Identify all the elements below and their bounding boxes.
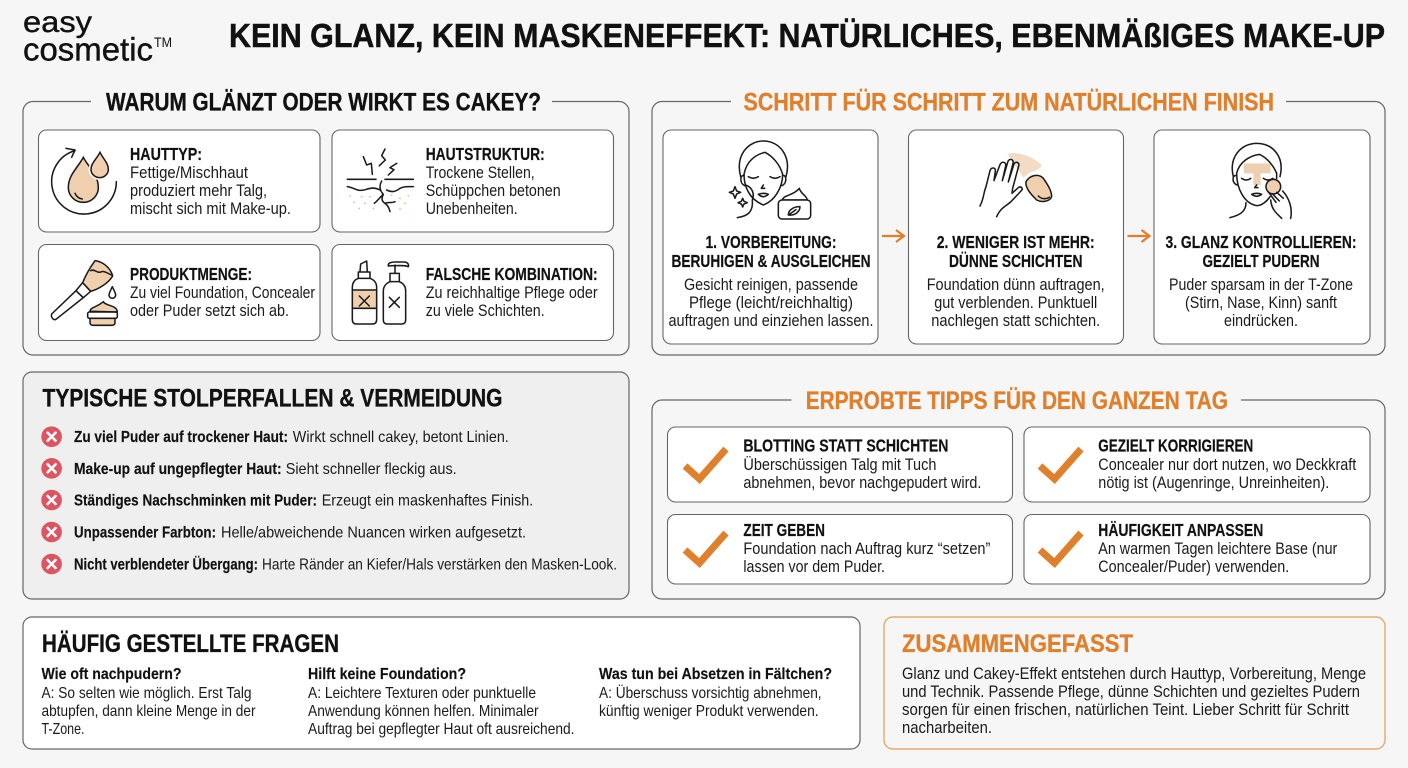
logo: easy <box>23 6 92 39</box>
tip: blotting: abnehmen, bevor nachgepudert wird. <box>743 474 981 492</box>
tip: zeit geben: Foundation nach Auftrag kurz “setzen” <box>743 540 990 558</box>
pitfall 1 <box>41 426 509 447</box>
text: Falsche Kombination: FALSCHE KOMBINATION: <box>426 264 598 284</box>
arrow: step 2 to 3 <box>1128 230 1150 242</box>
pitfall 4: Helle/abweichende Nuancen wirken aufgesetzt. <box>221 524 526 542</box>
pitfall 3: Erzeugt ein maskenhaftes Finish. <box>322 492 533 510</box>
pitfall 1: Zu viel Puder auf trockener Haut: <box>74 429 288 446</box>
text: step 2: 2. WENIGER IST MEHR: <box>937 232 1095 252</box>
text: step 2: gut verblenden. Punktuell <box>934 294 1097 312</box>
icon: cracked skin <box>347 149 413 212</box>
heading: pitfalls: TYPISCHE STOLPERFALLEN & VERMEIDUNG <box>42 385 502 413</box>
text: step 2: nachlegen statt schichten. <box>931 312 1100 330</box>
text: Produktmenge: Zu viel Foundation, Concealer <box>130 284 315 302</box>
text: step 1: 1. VORBEREITUNG: <box>706 232 836 252</box>
text: Falsche Kombination <box>426 264 598 320</box>
text: summary: und Technik. Passende Pflege, dünne Schichten und gezieltes Pudern <box>902 683 1360 701</box>
icon: face with T-zone <box>1230 143 1291 218</box>
text: step 3: (Stirn, Nase, Kinn) sanft <box>1185 294 1337 312</box>
text: step 1: Pflege (leicht/reichhaltig) <box>689 294 853 312</box>
text: Hautstruktur <box>426 144 561 218</box>
FAQ column 1: Wie oft nachpudern? <box>42 666 182 683</box>
card: Produktmenge <box>38 244 320 340</box>
text: step 2 <box>927 232 1105 330</box>
text: summary <box>902 665 1366 737</box>
FAQ column 3: A: Überschuss vorsichtig abnehmen, <box>599 684 822 702</box>
card: Falsche Kombination <box>332 244 614 340</box>
FAQ column 1 <box>42 666 256 738</box>
heading: causes: WARUM GLÄNZT ODER WIRKT ES CAKEY? <box>106 89 541 117</box>
FAQ column 2: Hilft keine Foundation? <box>308 666 466 683</box>
text: step 2: Foundation dünn auftragen, <box>927 276 1105 294</box>
text: Produktmenge: oder Puder setzt sich ab. <box>130 302 289 320</box>
logo: TM <box>154 35 172 50</box>
card: step 3 <box>1154 130 1370 344</box>
card: step 2 <box>908 130 1124 344</box>
pitfall 4: Unpassender Farbton: <box>74 524 216 542</box>
icon: oil drops <box>52 148 116 214</box>
pitfall 2: Make-up auf ungepflegter Haut: <box>74 461 282 478</box>
FAQ column 3: künftig weniger Produkt verwenden. <box>599 703 819 720</box>
logo <box>23 6 172 68</box>
panel: tips <box>652 386 1385 599</box>
text: Hauttyp: HAUTTYP: <box>130 144 202 164</box>
text: step 3 <box>1166 232 1356 330</box>
panel: pitfalls <box>23 372 629 599</box>
pitfall 2 <box>41 458 457 479</box>
FAQ column 1: T-Zone. <box>42 721 84 738</box>
text: Falsche Kombination: Zu reichhaltige Pflege oder <box>426 284 598 302</box>
text: step 3: Puder sparsam in der T-Zone <box>1169 276 1353 294</box>
text: summary: nacharbeiten. <box>902 719 992 737</box>
icon: face and cream <box>729 141 811 219</box>
icon: bottles <box>352 261 409 324</box>
text: step 3: eindrücken. <box>1224 312 1298 330</box>
pitfall 5: Nicht verblendeter Übergang: <box>74 554 258 574</box>
heading: tips: ERPROBTE TIPPS FÜR DEN GANZEN TAG <box>806 386 1228 415</box>
card: Hautstruktur <box>332 130 614 232</box>
text: summary: Glanz und Cakey-Effekt entstehen durch Hauttyp, Vorbereitung, Menge <box>902 665 1366 683</box>
text: step 3: 3. GLANZ KONTROLLIEREN: <box>1166 232 1356 252</box>
FAQ column 3: Was tun bei Absetzen in Fältchen? <box>599 666 832 683</box>
tip: korrigieren: nötig ist (Augenringe, Unreinheiten). <box>1098 474 1329 492</box>
text: summary: sorgen für einen frischen, natürlichen Teint. Lieber Schritt für Schritt <box>902 701 1349 719</box>
text: Hautstruktur: Trockene Stellen, <box>426 164 535 182</box>
text: Hauttyp: mischt sich mit Make-up. <box>130 200 291 218</box>
text: step 1: Gesicht reinigen, passende <box>684 276 858 294</box>
pitfall 3: Ständiges Nachschminken mit Puder: <box>74 492 317 510</box>
heading: FAQ: HÄUFIG GESTELLTE FRAGEN <box>42 630 339 658</box>
tip: haeufigkeit <box>1024 514 1370 584</box>
FAQ column 2 <box>308 666 574 738</box>
panel: steps <box>652 88 1385 355</box>
text: Hautstruktur: HAUTSTRUKTUR: <box>426 144 545 164</box>
text: step 1: BERUHIGEN & AUSGLEICHEN <box>672 251 870 271</box>
pitfall 5 <box>41 554 617 574</box>
panel: FAQ <box>23 617 860 749</box>
text: Hautstruktur: Schüppchen betonen <box>426 182 561 200</box>
text: step 1: auftragen und einziehen lassen. <box>668 312 874 330</box>
tip: korrigieren: GEZIELT KORRIGIEREN <box>1098 436 1253 456</box>
text: Produktmenge <box>130 264 315 320</box>
tip: zeit geben: lassen vor dem Puder. <box>743 558 885 576</box>
panel: summary <box>884 617 1385 749</box>
icon: hand and sponge <box>980 153 1052 217</box>
heading: summary: ZUSAMMENGEFASST <box>902 630 1133 658</box>
text: Produktmenge: PRODUKTMENGE: <box>130 264 252 284</box>
arrow: step 1 to 2 <box>882 230 904 242</box>
text: step 2: DÜNNE SCHICHTEN <box>949 251 1082 271</box>
FAQ column 2: Anwendung können helfen. Minimaler <box>308 703 539 720</box>
FAQ column 2: A: Leichtere Texturen oder punktuelle <box>308 685 536 702</box>
pitfall 2: Sieht schneller fleckig aus. <box>286 461 457 478</box>
pitfall 3 <box>41 490 533 510</box>
tip: korrigieren <box>1024 427 1370 502</box>
tip: haeufigkeit: Concealer/Puder) verwenden. <box>1098 558 1289 576</box>
text: Hauttyp: produziert mehr Talg, <box>130 182 267 200</box>
tip: haeufigkeit: An warmen Tagen leichtere Base (nur <box>1098 540 1338 558</box>
tip: blotting <box>668 427 1012 502</box>
tip: zeit geben: ZEIT GEBEN <box>743 520 825 540</box>
FAQ column 2: Auftrag bei gepflegter Haut oft ausreichend. <box>308 721 574 738</box>
FAQ column 1: abtupfen, dann kleine Menge in der <box>42 703 256 720</box>
tip: haeufigkeit: HÄUFIGKEIT ANPASSEN <box>1098 520 1263 540</box>
pitfall 5: Harte Ränder an Kiefer/Hals verstärken den Masken-Look. <box>262 556 617 574</box>
text: step 3: GEZIELT PUDERN <box>1202 251 1320 271</box>
text: Hautstruktur: Unebenheiten. <box>426 200 518 218</box>
tip: korrigieren: Concealer nur dort nutzen, wo Deckkraft <box>1098 456 1357 474</box>
FAQ column 3 <box>599 666 832 720</box>
tip: zeit geben <box>668 514 1012 584</box>
pitfall 1: Wirkt schnell cakey, betont Linien. <box>293 429 509 446</box>
text: step 1 <box>668 232 874 330</box>
logo: cosmetic <box>23 32 153 68</box>
text: Falsche Kombination: zu viele Schichten. <box>426 302 545 320</box>
icon: brush and cream <box>51 261 117 325</box>
tip: blotting: BLOTTING STATT SCHICHTEN <box>743 436 948 456</box>
text: Hauttyp <box>130 144 291 218</box>
heading: steps: SCHRITT FÜR SCHRITT ZUM NATÜRLICHEN FINISH <box>744 88 1274 117</box>
pitfall 4 <box>41 522 526 542</box>
panel: causes <box>23 89 629 355</box>
text: Hauttyp: Fettige/Mischhaut <box>130 164 248 182</box>
tip: blotting: Überschüssigen Talg mit Tuch <box>743 456 936 474</box>
card: step 1 <box>663 130 878 344</box>
FAQ column 1: A: So selten wie möglich. Erst Talg <box>42 685 252 702</box>
card: Hauttyp <box>38 130 320 232</box>
